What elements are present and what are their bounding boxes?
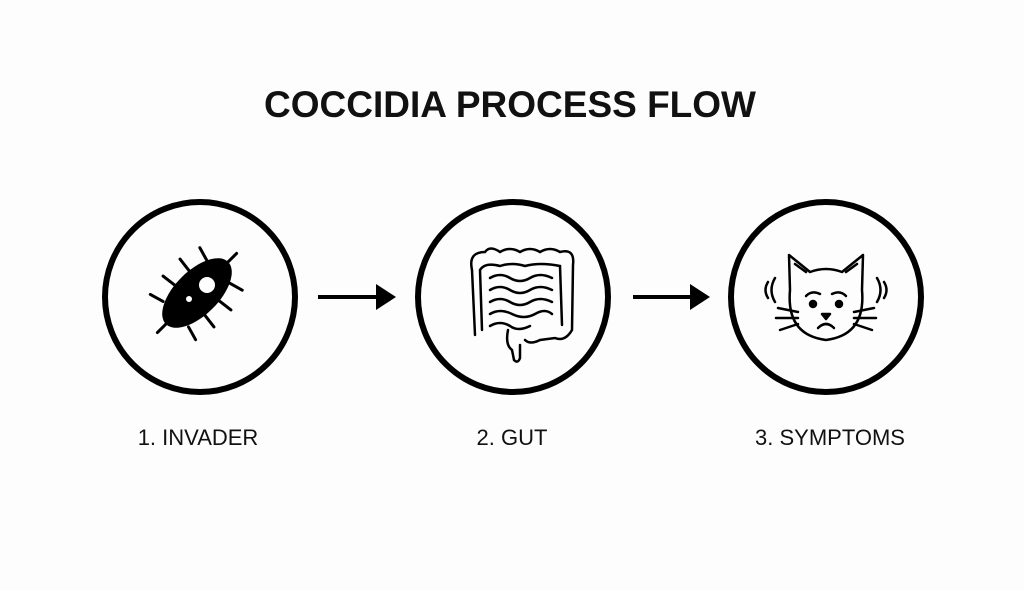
icon: sad cat [766, 255, 886, 340]
title: COCCIDIA PROCESS FLOW [264, 84, 756, 125]
label 2: 2. GUT [477, 425, 547, 450]
icon: intestines [471, 248, 573, 362]
label 3: 3. SYMPTOMS [755, 425, 905, 450]
step 3: symptoms [731, 202, 921, 392]
step 2: gut [418, 202, 608, 392]
icon: bacterium [132, 228, 262, 358]
step 1: invader [105, 202, 295, 392]
arrow 1 [318, 284, 396, 310]
arrow 2 [633, 284, 710, 310]
label 1: 1. INVADER [138, 425, 258, 450]
